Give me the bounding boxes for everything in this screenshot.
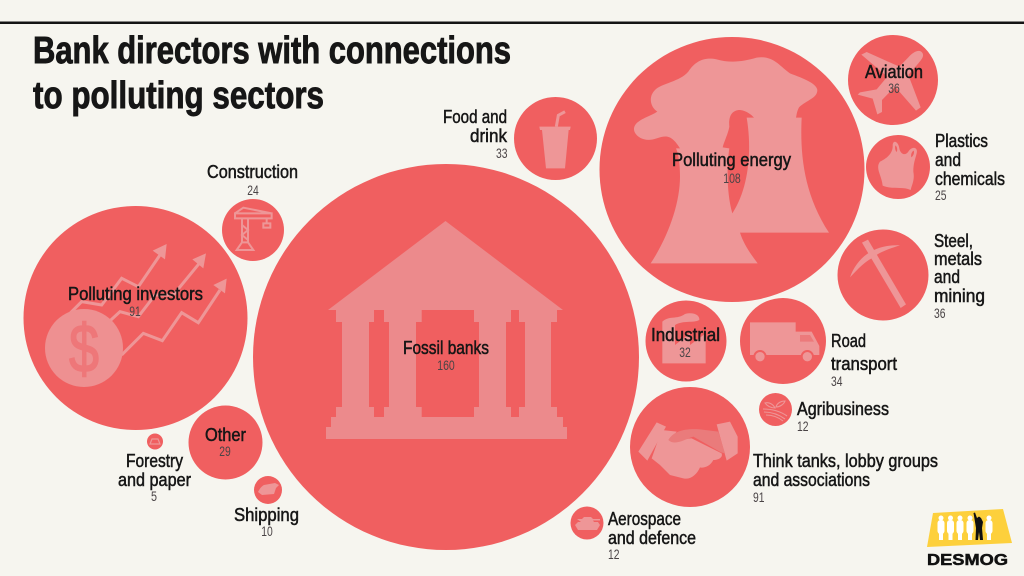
label: forestry and paper: [118, 451, 191, 504]
label: food and drink: [443, 107, 508, 161]
bubble: think tanks, lobby groups and associations: [630, 387, 750, 507]
bubble: fossil banks: [253, 164, 639, 550]
label: agribusiness: Agribusiness: [797, 399, 889, 419]
title: [33, 30, 511, 117]
icon: crops: [763, 401, 787, 421]
label: steel, metals and mining: and: [934, 267, 960, 287]
label: other: [205, 425, 246, 459]
label: aerospace and defence: 12: [608, 546, 620, 562]
icon: forestry: [150, 439, 160, 444]
label: steel, metals and mining: 36: [934, 305, 946, 321]
bubble: aerospace and defence: [570, 506, 604, 540]
bubble: food and drink: [514, 97, 597, 180]
bubble: steel, metals and mining: [838, 230, 928, 320]
label: steel, metals and mining: metals: [934, 249, 982, 269]
icon: handshake: [638, 422, 738, 479]
label: construction: Construction: [207, 162, 298, 182]
label: other: Other: [205, 425, 246, 445]
icon: crane: [235, 208, 272, 250]
label: road transport: [831, 331, 897, 389]
label: aerospace and defence: [608, 509, 696, 562]
label: steel, metals and mining: mining: [934, 286, 985, 306]
bubble: aviation: [848, 35, 938, 125]
label: fossil banks: Fossil banks: [403, 338, 489, 358]
label: steel, metals and mining: [934, 231, 985, 321]
icon: factory: [662, 313, 706, 363]
label: think tanks, lobby groups and associations: and associations: [753, 470, 870, 490]
label: plastics and chemicals: [935, 131, 1005, 203]
bubble: other: [188, 406, 262, 480]
label: aviation: 36: [888, 80, 900, 96]
icon: cup: [539, 112, 571, 168]
label: industrial: Industrial: [651, 325, 720, 345]
label: industrial: [651, 325, 720, 360]
label: construction: 24: [247, 182, 259, 198]
label: food and drink: drink: [470, 126, 508, 146]
icon: plane: [858, 51, 923, 114]
label: plastics and chemicals: Plastics: [935, 131, 988, 151]
icon: tank: [575, 517, 600, 530]
label: plastics and chemicals: 25: [935, 187, 947, 203]
label: plastics and chemicals: chemicals: [935, 169, 1005, 189]
label: aerospace and defence: Aerospace: [608, 509, 681, 529]
logo: DeSmog: [927, 509, 1012, 569]
label: polluting energy: [672, 150, 791, 186]
title: Bank directors with connections: [33, 30, 511, 72]
label: think tanks, lobby groups and associations: [753, 451, 938, 505]
label: other: 29: [219, 443, 231, 459]
title: to polluting sectors: [33, 75, 324, 117]
icon: plastic bag: [878, 142, 917, 190]
icon: rising arrows and dollar coin: $: [69, 311, 99, 387]
label: polluting energy: Polluting energy: [672, 150, 791, 170]
label: think tanks, lobby groups and associations: Think tanks, lobby groups: [753, 451, 938, 471]
bubble: polluting energy: [600, 37, 864, 302]
label: polluting investors: 91: [129, 303, 141, 319]
icon: truck: [750, 322, 819, 362]
label: food and drink: 33: [496, 145, 508, 161]
icon: rising arrows and dollar coin: [45, 244, 227, 387]
label: shipping: [234, 505, 299, 539]
label: road transport: 34: [831, 373, 843, 389]
icon: bank: [326, 221, 567, 439]
label: food and drink: Food and: [443, 107, 507, 127]
label: shipping: 10: [261, 523, 273, 539]
label: road transport: Road: [831, 331, 866, 351]
label: shipping: Shipping: [234, 505, 299, 525]
label: forestry and paper: Forestry: [126, 451, 183, 471]
bubble: agribusiness: [759, 393, 792, 426]
icon: ship: [258, 483, 279, 495]
label: steel, metals and mining: Steel,: [934, 231, 973, 251]
label: think tanks, lobby groups and associations: 91: [753, 489, 765, 505]
label: industrial: 32: [679, 344, 691, 360]
label: agribusiness: 12: [797, 418, 809, 434]
label: road transport: transport: [831, 354, 897, 374]
label: fossil banks: [403, 338, 489, 373]
icon: pickaxe: [850, 240, 906, 308]
label: aviation: [865, 62, 923, 96]
bubble: polluting investors: [24, 206, 248, 430]
label: plastics and chemicals: and: [935, 150, 961, 170]
bubble: road transport: [740, 298, 826, 384]
label: polluting investors: Polluting investors: [68, 284, 203, 304]
label: forestry and paper: 5: [151, 488, 157, 504]
label: forestry and paper: and paper: [118, 470, 191, 490]
logo: DeSmog: DESMOG: [927, 552, 1008, 569]
icon: cooling towers: [634, 57, 829, 263]
label: agribusiness: [797, 399, 889, 434]
label: aviation: Aviation: [865, 62, 923, 82]
label: polluting energy: 108: [723, 170, 741, 186]
bubble: construction: [222, 199, 284, 261]
bubble: plastics and chemicals: [866, 135, 930, 199]
label: aerospace and defence: and defence: [608, 528, 696, 548]
label: polluting investors: [68, 284, 203, 319]
label: fossil banks: 160: [437, 357, 455, 373]
bubble: shipping: [254, 476, 282, 504]
bubble: forestry and paper: [147, 434, 163, 450]
label: construction: [207, 162, 298, 198]
bubble: industrial: [646, 300, 726, 382]
